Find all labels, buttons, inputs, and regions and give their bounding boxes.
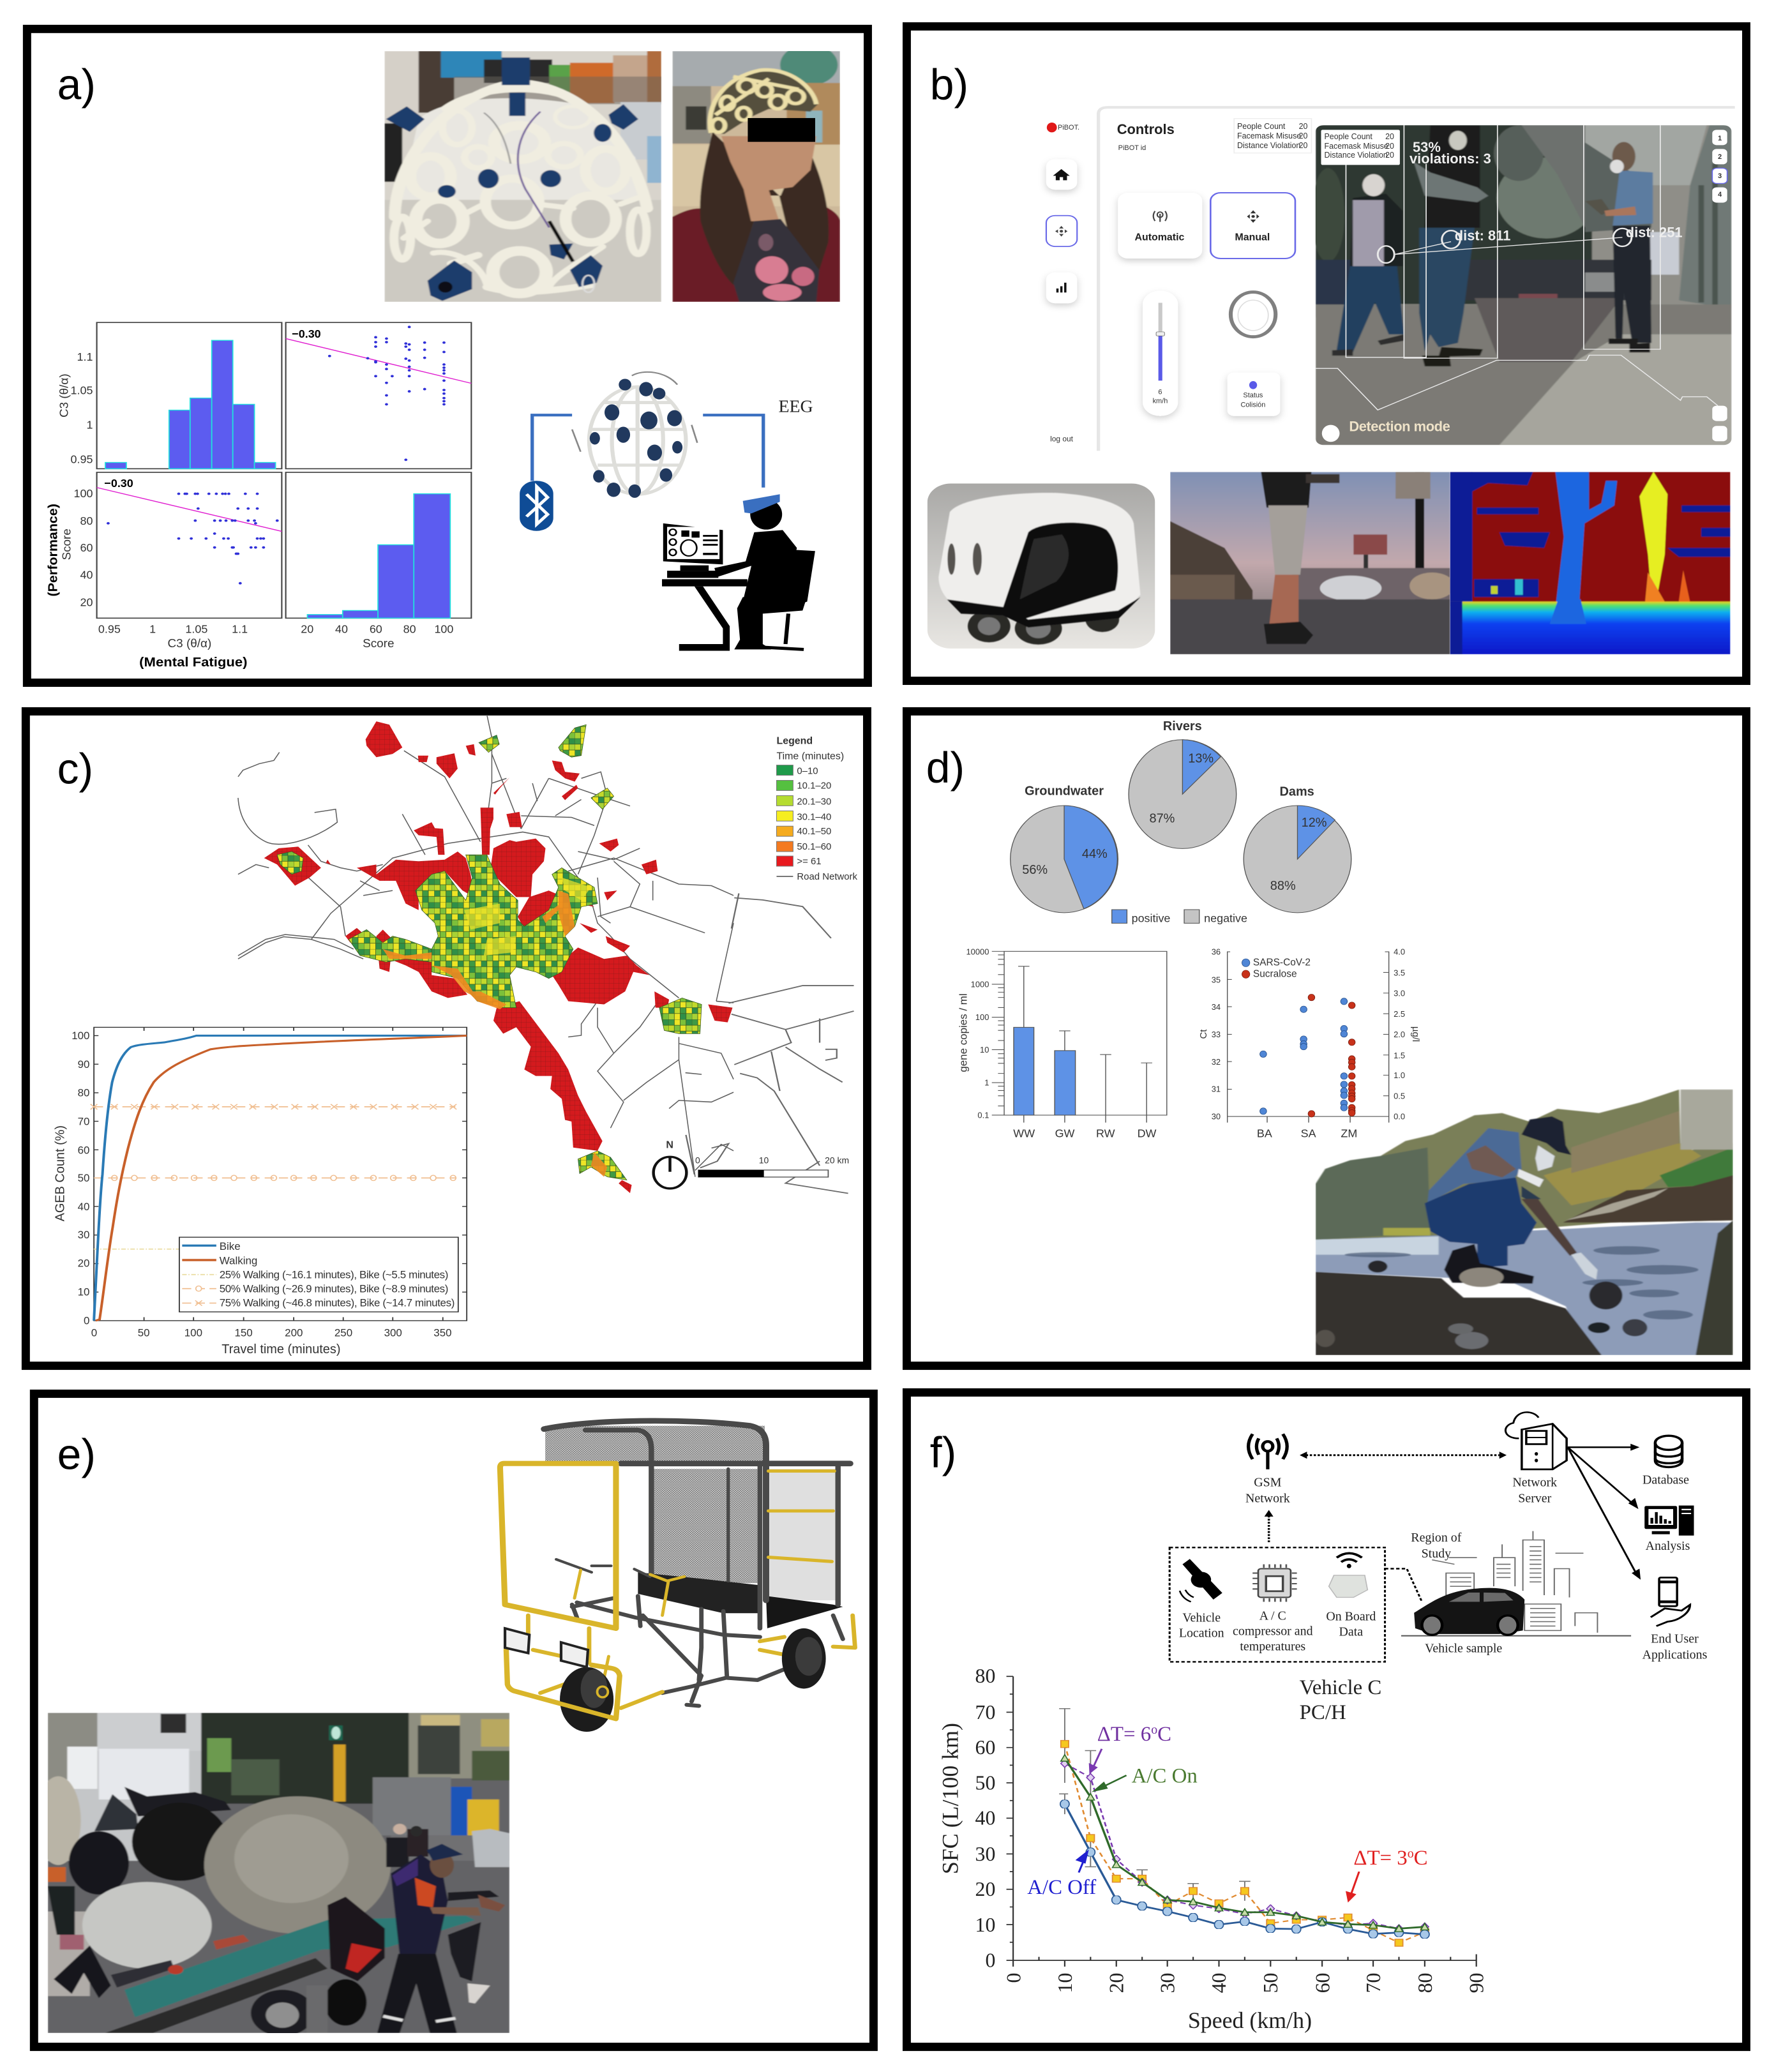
chart: SFC vs speed: 0 bbox=[1002, 1973, 1025, 1983]
chart: cumulative AGEB count vs travel time: 100 bbox=[184, 1326, 202, 1339]
chart: SFC vs speed: 60 bbox=[1311, 1973, 1334, 1993]
chart: SFC vs speed: 70 bbox=[975, 1701, 995, 1723]
chart: cumulative AGEB count vs travel time: 20 bbox=[78, 1257, 89, 1270]
heading: f): f) bbox=[930, 1429, 956, 1476]
chart: correlation matrix of C3 and score: 20 bbox=[80, 596, 93, 608]
photo: detection camera view: Distance Violation bbox=[1324, 151, 1388, 160]
chart: Ct and sucralose scatter: SARS-CoV-2 bbox=[1253, 957, 1311, 968]
photo: detection camera view: dist: 811 bbox=[1455, 228, 1510, 244]
chart: gene copies per ml bar chart: gene copies / ml bbox=[958, 993, 970, 1072]
map: travel time by AGEB: N bbox=[666, 1139, 673, 1150]
photo: detection camera view: 20 bbox=[1385, 151, 1394, 160]
chart: correlation matrix of C3 and score: −0.30 bbox=[104, 477, 133, 490]
chart: correlation matrix of C3 and score: Score bbox=[61, 529, 74, 560]
privacy bar bbox=[748, 118, 815, 142]
chart: gene copies per ml bar chart: WW bbox=[1013, 1127, 1035, 1139]
chart: SFC vs speed: 10 bbox=[1054, 1973, 1076, 1993]
chart: gene copies per ml bar chart: 0.1 bbox=[977, 1111, 989, 1120]
diagram: telemetry network: Location bbox=[1179, 1626, 1224, 1640]
chart: cumulative AGEB count vs travel time: 250 bbox=[335, 1326, 352, 1339]
panel e: waste collection vehicle bbox=[34, 1393, 873, 2047]
diagram: telemetry network: A / C bbox=[1259, 1609, 1286, 1623]
chart: cumulative AGEB count vs travel time: 80 bbox=[78, 1087, 89, 1099]
chart: cumulative AGEB count vs travel time: Travel time (minutes) bbox=[222, 1342, 340, 1356]
chart: cumulative AGEB count vs travel time: 50 bbox=[78, 1172, 89, 1184]
photo: detection camera view: 1 bbox=[1718, 135, 1722, 142]
dashboard: controls UI: Automatic bbox=[1134, 232, 1185, 243]
chart: cumulative AGEB count vs travel time: Bike bbox=[220, 1240, 241, 1252]
map legend: 40.1–50 bbox=[797, 826, 831, 837]
chart: SFC vs speed: SFC (L/100 km) bbox=[938, 1723, 963, 1874]
icon: satellite bbox=[1180, 1559, 1222, 1602]
chart: Ct and sucralose scatter: 0.0 bbox=[1394, 1112, 1405, 1122]
chart: SFC vs speed: 40 bbox=[975, 1806, 995, 1829]
icon: network server bbox=[1505, 1412, 1567, 1469]
chart: pie charts by water source: negative bbox=[1204, 912, 1247, 925]
illustration: electric cargo tricycle bbox=[500, 1421, 855, 1732]
dashboard: controls UI: Status bbox=[1243, 392, 1263, 400]
chart: correlation matrix of C3 and score: (Performance) bbox=[47, 504, 61, 597]
chart: correlation matrix of C3 and score: 80 bbox=[403, 622, 416, 635]
chart: pie charts by water source: positive bbox=[1132, 912, 1170, 925]
heading: c): c) bbox=[57, 745, 93, 793]
chart: pie charts by water source: 12% bbox=[1302, 816, 1327, 830]
photo: informal recycler pulling cart bbox=[36, 1713, 509, 2036]
chart: gene copies per ml bar chart: 1000 bbox=[971, 979, 989, 989]
icon: bluetooth bbox=[520, 481, 553, 531]
chart: cumulative AGEB count vs travel time: 30 bbox=[78, 1229, 89, 1241]
icon: analysis computer bbox=[1644, 1506, 1694, 1536]
dashboard: controls UI: PiBOT id bbox=[1118, 144, 1146, 152]
chart: Ct and sucralose scatter: SA bbox=[1301, 1127, 1316, 1139]
panel a: EEG mental fatigue bbox=[27, 29, 868, 683]
chart: correlation matrix of C3 and score: 1.05 bbox=[71, 384, 93, 397]
map legend bbox=[776, 736, 858, 882]
chart: correlation matrix of C3 and score bbox=[47, 322, 471, 670]
photo: researcher sampling river water bbox=[1316, 1090, 1733, 1355]
icon: GSM antenna bbox=[1249, 1434, 1287, 1469]
chart: Ct and sucralose scatter: Ct bbox=[1198, 1029, 1209, 1039]
map legend: Time (minutes) bbox=[776, 751, 844, 762]
chart: SFC vs speed: o bbox=[1408, 1847, 1414, 1861]
map: travel time by AGEB bbox=[238, 715, 854, 1193]
chart: SFC vs speed: ΔT= 3 bbox=[1353, 1847, 1408, 1870]
chart: SFC vs speed: A/C Off bbox=[1027, 1876, 1096, 1899]
chart: SFC vs speed: 10 bbox=[975, 1914, 995, 1936]
panel f frame bbox=[906, 1392, 1747, 2047]
chart: gene copies per ml bar chart: 100 bbox=[975, 1012, 989, 1022]
map legend: 20.1–30 bbox=[797, 796, 831, 807]
diagram: telemetry network bbox=[1169, 1412, 1708, 1662]
diagram: EEG bluetooth link bbox=[520, 372, 815, 651]
heading: a): a) bbox=[57, 61, 96, 109]
chart: correlation matrix of C3 and score: 60 bbox=[80, 541, 93, 554]
chart: cumulative AGEB count vs travel time: 10 bbox=[78, 1286, 89, 1298]
chart: Ct and sucralose scatter: 2.5 bbox=[1394, 1009, 1405, 1019]
panel b frame bbox=[906, 26, 1747, 681]
chart: correlation matrix of C3 and score: 100 bbox=[74, 487, 93, 500]
chart: Ct and sucralose scatter: 35 bbox=[1212, 975, 1221, 984]
chart: cumulative AGEB count vs travel time: 350 bbox=[433, 1326, 452, 1339]
chart: SFC vs speed: 90 bbox=[1466, 1973, 1488, 1993]
map legend: 50.1–60 bbox=[797, 841, 831, 852]
chart: SFC vs speed: 40 bbox=[1208, 1973, 1230, 1993]
chart: Ct and sucralose scatter: BA bbox=[1257, 1127, 1272, 1139]
chart: correlation matrix of C3 and score: 0.95 bbox=[71, 453, 93, 465]
heading: e): e) bbox=[57, 1430, 96, 1478]
chart: gene copies per ml bar chart: 10 bbox=[980, 1045, 989, 1055]
diagram: telemetry network: Study bbox=[1422, 1547, 1451, 1561]
chart: pie charts by water source: 87% bbox=[1150, 811, 1175, 825]
chart: correlation matrix of C3 and score: 40 bbox=[80, 569, 93, 582]
icon: on-board data device bbox=[1329, 1553, 1367, 1597]
photo: detection camera view: 3 bbox=[1718, 172, 1722, 180]
chart: cumulative AGEB count vs travel time: 60 bbox=[78, 1144, 89, 1156]
chart: pie charts by water source: 44% bbox=[1082, 847, 1108, 861]
panel d frame bbox=[906, 711, 1747, 1366]
icon: bars bbox=[1056, 283, 1067, 292]
chart: gene copies per ml bar chart: 10000 bbox=[966, 947, 989, 956]
chart: SFC vs speed: 60 bbox=[975, 1736, 995, 1759]
chart: cumulative AGEB count vs travel time: 200 bbox=[285, 1326, 303, 1339]
chart: pie charts by water source: Dams bbox=[1280, 785, 1314, 799]
photo: detection camera view: People Count bbox=[1324, 132, 1372, 141]
chart: SFC vs speed: PC/H bbox=[1300, 1701, 1346, 1724]
photo: detection camera view: Detection mode bbox=[1349, 418, 1450, 434]
chart: correlation matrix of C3 and score: C3 (θ/α) bbox=[168, 637, 211, 650]
chart: SFC vs speed: 80 bbox=[975, 1665, 995, 1687]
chart: SFC vs speed: 50 bbox=[1259, 1973, 1282, 1993]
dashboard: controls UI: log out bbox=[1050, 434, 1074, 443]
arrows: annotations bbox=[1079, 1749, 1359, 1900]
central travel-time cells bbox=[277, 724, 702, 1180]
chart: pie charts by water source: Rivers bbox=[1163, 719, 1202, 733]
chart: Ct and sucralose scatter: 1.0 bbox=[1394, 1070, 1405, 1080]
chart: pie charts by water source: 56% bbox=[1022, 863, 1048, 877]
diagram: telemetry network: Analysis bbox=[1646, 1539, 1690, 1553]
chart: Ct and sucralose scatter bbox=[1198, 947, 1421, 1139]
icon: home bbox=[1053, 169, 1070, 180]
chart: SFC vs speed: A/C On bbox=[1132, 1765, 1198, 1788]
chart: SFC vs speed: Vehicle C bbox=[1300, 1676, 1381, 1699]
chart: SFC vs speed: C bbox=[1157, 1723, 1171, 1746]
heading: b): b) bbox=[930, 61, 968, 109]
chart: cumulative AGEB count vs travel time: 50% Walking (~26.9 minutes), Bike (~8.9 minutes) bbox=[220, 1283, 448, 1295]
diagram: telemetry network: On Board bbox=[1326, 1610, 1376, 1624]
map legend: >= 61 bbox=[797, 856, 822, 867]
panel c frame bbox=[26, 711, 867, 1366]
map: travel time by AGEB: 20 km bbox=[825, 1155, 849, 1165]
map legend: Legend bbox=[776, 736, 813, 747]
illustration: car in city sketch bbox=[1401, 1531, 1631, 1636]
chart: correlation matrix of C3 and score: 60 bbox=[370, 622, 382, 635]
panel a frame bbox=[27, 29, 868, 683]
chart: cumulative AGEB count vs travel time: Walking bbox=[220, 1255, 257, 1267]
chart: SFC vs speed: ΔT= 6 bbox=[1097, 1723, 1151, 1746]
chart: Ct and sucralose scatter: 3.5 bbox=[1394, 968, 1405, 977]
chart: cumulative AGEB count vs travel time: 100 bbox=[71, 1030, 89, 1042]
chart: gene copies per ml bar chart: GW bbox=[1055, 1127, 1075, 1139]
icon: wireless EEG helmet bbox=[572, 372, 697, 498]
chart: Ct and sucralose scatter: 1.5 bbox=[1394, 1051, 1405, 1060]
chart: SFC vs speed: Speed (km/h) bbox=[1188, 2008, 1312, 2033]
chart: correlation matrix of C3 and score: 1 bbox=[149, 622, 156, 635]
photo: street scene RGB camera bbox=[1170, 472, 1454, 654]
chart: gene copies per ml bar chart: 1 bbox=[984, 1078, 989, 1088]
panel f: vehicle fuel consumption bbox=[906, 1392, 1747, 2047]
chart: Ct and sucralose scatter: 34 bbox=[1212, 1002, 1221, 1012]
diagram: telemetry network: Network bbox=[1512, 1475, 1557, 1489]
chart: correlation matrix of C3 and score: 20 bbox=[301, 622, 313, 635]
dashboard: controls UI: Manual bbox=[1235, 232, 1270, 243]
dashboard: controls UI: PiBOT. bbox=[1058, 124, 1079, 131]
chart: SFC vs speed: 20 bbox=[975, 1878, 995, 1900]
diagram: telemetry network: Network bbox=[1245, 1491, 1290, 1505]
icon: arrows bbox=[1247, 210, 1259, 223]
chart: cumulative AGEB count vs travel time: 25% Walking (~16.1 minutes), Bike (~5.5 minutes) bbox=[220, 1269, 448, 1281]
chart: cumulative AGEB count vs travel time: 0 bbox=[84, 1314, 89, 1326]
dashboard: controls UI: 20 bbox=[1299, 131, 1308, 140]
chart: gene copies per ml bar chart bbox=[958, 947, 1167, 1139]
chart: gene copies per ml bar chart: DW bbox=[1138, 1127, 1157, 1139]
dashboard: controls UI: Facemask Misuse bbox=[1237, 131, 1301, 140]
photo: detection camera view: 20 bbox=[1385, 132, 1394, 141]
diagram: telemetry network: GSM bbox=[1254, 1475, 1282, 1489]
dashboard: controls UI: People Count bbox=[1237, 122, 1286, 131]
dashboard: controls UI bbox=[1046, 107, 1735, 451]
diagram: telemetry network: compressor and bbox=[1233, 1625, 1313, 1639]
chart: cumulative AGEB count vs travel time: 70 bbox=[78, 1116, 89, 1128]
chart: correlation matrix of C3 and score: 0.95 bbox=[98, 622, 121, 635]
chart: SFC vs speed: 70 bbox=[1362, 1973, 1385, 1993]
dashboard: controls UI: Colisión bbox=[1240, 402, 1265, 409]
chart: correlation matrix of C3 and score: 40 bbox=[335, 622, 348, 635]
chart: correlation matrix of C3 and score: (Mental Fatigue) bbox=[139, 656, 248, 670]
photo: PiBOT robot render bbox=[928, 483, 1155, 649]
photo: detection camera view: violations: 3 bbox=[1409, 151, 1491, 167]
chart: Ct and sucralose scatter: 2.0 bbox=[1394, 1030, 1405, 1039]
icon: antenna bbox=[1154, 211, 1167, 222]
chart: cumulative AGEB count vs travel time: AGEB Count (%) bbox=[54, 1125, 68, 1221]
map: travel time by AGEB: 10 bbox=[759, 1155, 769, 1165]
dashboard: controls UI: 20 bbox=[1299, 141, 1308, 150]
chart: SFC vs speed: 20 bbox=[1106, 1973, 1128, 1993]
road network, east bbox=[686, 894, 854, 1193]
chart: correlation matrix of C3 and score: 1 bbox=[86, 419, 93, 432]
chart: correlation matrix of C3 and score: 1.05 bbox=[185, 622, 207, 635]
chart: SFC vs speed: 0 bbox=[985, 1949, 995, 1972]
chart: Ct and sucralose scatter: 32 bbox=[1212, 1057, 1221, 1067]
diagram: telemetry network: Database bbox=[1642, 1473, 1689, 1487]
chart: Ct and sucralose scatter: 33 bbox=[1212, 1030, 1221, 1039]
chart: SFC vs speed bbox=[938, 1665, 1488, 2033]
chart: depth map bbox=[1450, 472, 1731, 654]
map legend: 0–10 bbox=[797, 766, 818, 777]
diagram: telemetry network: Region of bbox=[1411, 1531, 1462, 1545]
panel b: PiBOT robot bbox=[906, 26, 1747, 681]
chart: Ct and sucralose scatter: 30 bbox=[1212, 1112, 1221, 1122]
chart: Ct and sucralose scatter: 4.0 bbox=[1394, 947, 1405, 956]
chart: cumulative AGEB count vs travel time bbox=[54, 1027, 467, 1356]
chart: correlation matrix of C3 and score: 1.1 bbox=[77, 350, 93, 363]
chart: cumulative AGEB count vs travel time: 75% Walking (~46.8 minutes), Bike (~14.7 minutes) bbox=[220, 1296, 455, 1309]
panel c: walking and bike accessibility bbox=[26, 711, 867, 1366]
chart: SFC vs speed: o bbox=[1151, 1723, 1157, 1737]
chart: SFC vs speed: 30 bbox=[975, 1843, 995, 1865]
diagram: telemetry network: Vehicle bbox=[1182, 1611, 1221, 1625]
chart: Ct and sucralose scatter: 3.0 bbox=[1394, 988, 1405, 998]
dashboard: controls UI: 20 bbox=[1299, 122, 1308, 131]
photo: EEG helmet on table bbox=[384, 51, 662, 302]
dashboard: controls UI: 6 bbox=[1158, 389, 1162, 396]
map legend: 10.1–20 bbox=[797, 780, 831, 791]
diagram: telemetry network: End User bbox=[1651, 1632, 1699, 1646]
chart: pie charts by water source: Groundwater bbox=[1025, 784, 1104, 798]
panel e frame bbox=[34, 1393, 873, 2047]
chart: pie charts by water source: 88% bbox=[1270, 879, 1296, 893]
diagram: telemetry network: Server bbox=[1518, 1491, 1552, 1505]
dashed sensor box bbox=[1169, 1547, 1385, 1662]
chart: Ct and sucralose scatter: 31 bbox=[1212, 1085, 1221, 1094]
map: travel time by AGEB: 0 bbox=[695, 1155, 700, 1165]
photo: detection camera view: 20 bbox=[1385, 142, 1394, 151]
chart: correlation matrix of C3 and score: 80 bbox=[80, 514, 93, 527]
diagram: telemetry network: Applications bbox=[1642, 1648, 1708, 1662]
diagram: telemetry network: temperatures bbox=[1240, 1639, 1305, 1653]
map legend: 30.1–40 bbox=[797, 811, 831, 822]
photo: detection camera view: 2 bbox=[1718, 153, 1722, 161]
chart: cumulative AGEB count vs travel time: 90 bbox=[78, 1058, 89, 1070]
icon: phone in hand bbox=[1651, 1577, 1690, 1626]
photo: detection camera view: 53% bbox=[1413, 139, 1441, 155]
chart: correlation matrix of C3 and score: C3 (θ/α) bbox=[58, 373, 71, 417]
icon: north arrow bbox=[654, 1157, 686, 1189]
diagram: telemetry network: Vehicle sample bbox=[1425, 1641, 1502, 1655]
panel d: SARS-CoV-2 in water bbox=[906, 711, 1747, 1366]
chart: cumulative AGEB count vs travel time: 50 bbox=[138, 1326, 150, 1339]
chart: correlation matrix of C3 and score: Score bbox=[363, 637, 394, 650]
chart: Ct and sucralose scatter: Sucralose bbox=[1253, 968, 1297, 979]
photo: detection camera view: dist: 251 bbox=[1626, 225, 1683, 241]
chart: Ct and sucralose scatter: 0.5 bbox=[1394, 1092, 1405, 1101]
chart: correlation matrix of C3 and score: 1.1 bbox=[232, 622, 248, 635]
chart: Ct and sucralose scatter: µg/l bbox=[1410, 1026, 1421, 1042]
photo: detection camera view bbox=[1311, 125, 1732, 445]
icon: compressor chip bbox=[1252, 1565, 1297, 1602]
dashboard: controls UI: Controls bbox=[1117, 121, 1175, 137]
chart: pie charts by water source: 13% bbox=[1188, 752, 1214, 766]
chart: gene copies per ml bar chart: RW bbox=[1096, 1127, 1115, 1139]
icon: move bbox=[1055, 226, 1067, 237]
icon: person at computer bbox=[662, 494, 815, 651]
chart: cumulative AGEB count vs travel time: 0 bbox=[91, 1326, 97, 1339]
photo: detection camera view: Facemask Misuse bbox=[1324, 142, 1388, 151]
icon: database bbox=[1655, 1436, 1682, 1467]
chart: SFC vs speed: 50 bbox=[975, 1772, 995, 1794]
chart: pie charts by water source bbox=[1011, 719, 1351, 925]
scale bar bbox=[698, 1170, 828, 1177]
heading: d): d) bbox=[926, 744, 965, 792]
chart: SFC vs speed: C bbox=[1414, 1847, 1428, 1870]
chart: correlation matrix of C3 and score: 100 bbox=[434, 622, 453, 635]
chart: Ct and sucralose scatter: 36 bbox=[1212, 947, 1221, 956]
chart: cumulative AGEB count vs travel time: 40 bbox=[78, 1201, 89, 1213]
diagram: telemetry network: Data bbox=[1339, 1625, 1363, 1639]
label: EEG: EEG bbox=[778, 397, 813, 417]
photo: participant wearing EEG bbox=[672, 44, 840, 302]
built-up red areas bbox=[264, 721, 733, 1193]
dashboard: controls UI: Distance Violation bbox=[1237, 141, 1300, 150]
road network, central bbox=[238, 715, 733, 1177]
chart: SFC vs speed: 30 bbox=[1156, 1973, 1178, 1993]
chart: correlation matrix of C3 and score: −0.30 bbox=[292, 327, 321, 340]
chart: cumulative AGEB count vs travel time: 150 bbox=[234, 1326, 253, 1339]
chart: SFC vs speed: 80 bbox=[1414, 1973, 1436, 1993]
dashboard: controls UI: km/h bbox=[1153, 398, 1168, 405]
chart: Ct and sucralose scatter: ZM bbox=[1341, 1127, 1357, 1139]
chart: cumulative AGEB count vs travel time: 300 bbox=[384, 1326, 402, 1339]
map legend: Road Network bbox=[797, 871, 858, 882]
photo: detection camera view: 4 bbox=[1718, 191, 1722, 199]
